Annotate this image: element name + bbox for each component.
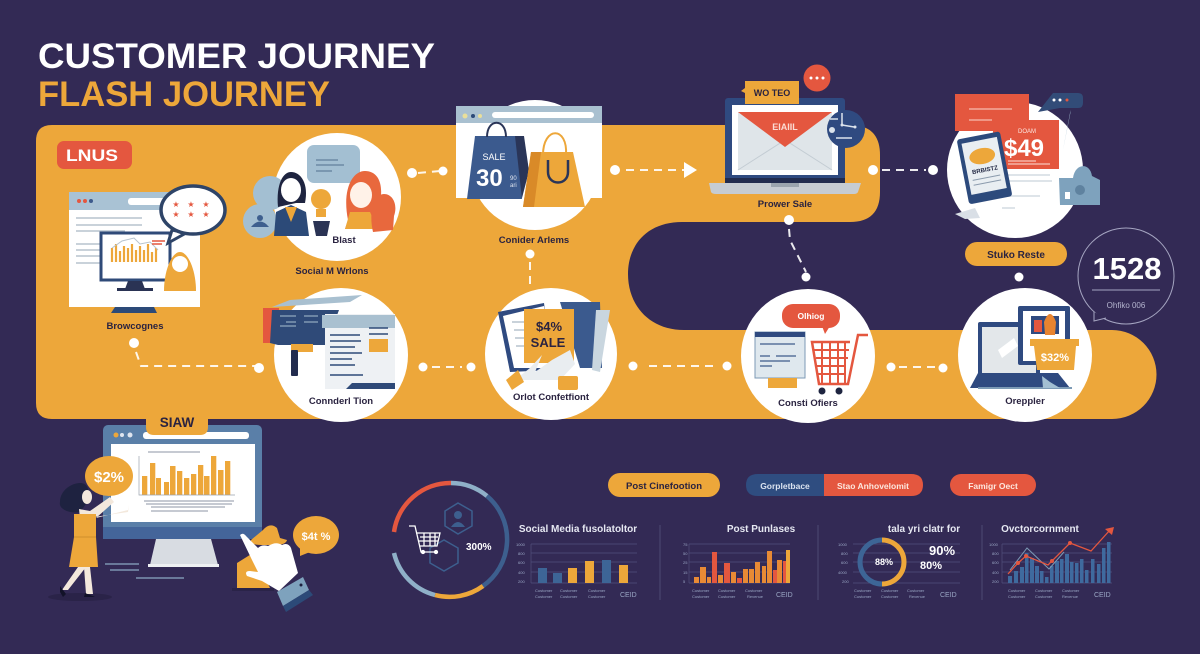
- chart: post purchase bars: Customer: [718, 594, 736, 599]
- illustration: woman presenting: [48, 456, 133, 601]
- chart: donut percentages: CEID: [940, 592, 957, 599]
- chart: social media bars: Customer: [588, 594, 606, 599]
- step: Browsing monitor: [69, 186, 225, 332]
- stat bubble: 1528: [1092, 251, 1162, 286]
- speech bubble with stars: ★: [172, 210, 180, 219]
- chart: social media bars: Customer: [535, 588, 553, 593]
- red offer cards: [955, 94, 1059, 169]
- title: CUSTOMER JOURNEY: [38, 37, 435, 76]
- chart: combo bars and trend line: Customer: [1035, 594, 1053, 599]
- step: Consideration bags: [456, 100, 602, 246]
- shopping cart: [812, 335, 868, 394]
- camera icon: [1059, 166, 1100, 205]
- chart: combo bars and trend line: Customer: [1008, 594, 1026, 599]
- tag: LNUS: LNUS: [66, 146, 118, 165]
- chart: combo bars and trend line: Ovctorcornment: [1001, 524, 1080, 535]
- bar chart: [142, 456, 230, 495]
- chart: combo bars and trend line: Customer: [1062, 588, 1080, 593]
- chart: combo bars and trend line: 200: [992, 579, 999, 584]
- tag: WO TEO: [741, 81, 799, 104]
- step: Browsing monitor: Browcognes: [106, 321, 164, 332]
- chart: post purchase bars: Customer: [692, 588, 710, 593]
- navy sale bag: ari: [510, 183, 517, 189]
- chart: combo bars and trend line: Revenue: [1062, 594, 1079, 599]
- chart: donut percentages: tala yri clatr for: [888, 524, 960, 535]
- chart: social media bars: Customer: [535, 594, 553, 599]
- chart: post purchase bars: Post Punlases: [727, 524, 796, 535]
- pill: blue and red split: Stao Anhovelomit: [837, 481, 909, 491]
- chart: combo bars and trend line: Customer: [1035, 588, 1053, 593]
- price bubble: $2%: [94, 469, 124, 486]
- chart: post purchase bars: 75: [683, 542, 688, 547]
- chart: donut percentages: [838, 524, 960, 599]
- chart: post purchase bars: Revenue: [747, 594, 764, 599]
- chart: donut percentages: 80%: [920, 560, 942, 572]
- step: Order confidence: [485, 288, 617, 420]
- chart: post purchase bars: 15: [683, 570, 688, 575]
- donut: cart ring: 300%: [466, 542, 492, 553]
- chart: post purchase bars: CEID: [776, 592, 793, 599]
- cart icon: [409, 526, 440, 554]
- navy sale bag: 30: [476, 165, 503, 192]
- chart: donut percentages: Customer: [907, 588, 925, 593]
- pills row: [608, 473, 1036, 497]
- chart: social media bars: CEID: [620, 592, 637, 599]
- mini monitor chart: [101, 233, 170, 291]
- chart: donut percentages: 800: [841, 551, 848, 556]
- chart: donut percentages: Customer: [881, 594, 899, 599]
- stat bubble: Ohfiko 006: [1107, 301, 1146, 310]
- pill: post confirmation: Post Cinefootion: [626, 481, 702, 492]
- chart: donut percentages: Revenue: [909, 594, 926, 599]
- orange bag: [523, 133, 585, 207]
- step: Conditional documents: Connderl Tion: [309, 396, 373, 407]
- journey path band: [36, 125, 1156, 419]
- pill: family best: [950, 474, 1036, 496]
- pill: blue and red split: Gorpletbace: [760, 481, 810, 491]
- chart: social media bars: Customer: [560, 594, 578, 599]
- chart: post purchase bars: 25: [683, 560, 688, 565]
- chart: post purchase bars: Customer: [718, 588, 736, 593]
- price bubble: $4t %: [302, 531, 331, 543]
- speech bubble with stars: ★: [202, 210, 210, 219]
- sale card: [524, 309, 574, 363]
- pill: post confirmation: [608, 473, 720, 497]
- pill: family best: Famigr Oect: [968, 481, 1018, 491]
- tab: SIAW: [146, 410, 208, 435]
- red-haired women: [345, 171, 395, 232]
- step: Social Media: Blast: [332, 235, 356, 246]
- illustration: pointing hand: [232, 516, 339, 612]
- step: Consideration bags: Conider Arlems: [499, 235, 569, 246]
- connectors: [129, 162, 1024, 373]
- chat bubble: [1038, 93, 1083, 150]
- speech bubble with stars: ★: [187, 210, 195, 219]
- sale card: SALE: [531, 335, 566, 350]
- step: Cart offers: Consti Ofiers: [778, 398, 838, 409]
- speech bubble with stars: ★: [202, 200, 210, 209]
- step: Email laptop: EIAIIL: [772, 122, 798, 132]
- pill: blue and red split: [746, 474, 923, 496]
- tag: LNUS: [57, 141, 132, 169]
- chart: social media bars: 200: [518, 579, 525, 584]
- price bubble: [85, 456, 133, 496]
- chart: combo bars and trend line: 600: [992, 560, 999, 565]
- chart: post purchase bars: Customer: [692, 594, 710, 599]
- chart: donut percentages: 1000: [838, 542, 848, 547]
- title: [38, 37, 435, 114]
- speech bubble with stars: [161, 186, 225, 243]
- chart: combo bars and trend line: 400: [992, 570, 999, 575]
- step: Conditional documents: [263, 288, 408, 422]
- speech bubble with stars: ★: [172, 200, 180, 209]
- chart: donut percentages: 90%: [929, 543, 955, 558]
- chart: donut percentages: 88%: [875, 557, 893, 567]
- navy sale bag: [467, 123, 529, 199]
- step: Price offer: [947, 93, 1100, 238]
- tab: SIAW: SIAW: [160, 415, 195, 430]
- red bubble: Olhiog: [798, 311, 824, 321]
- businesswoman: [274, 172, 309, 236]
- step: Oreppler devices: [958, 288, 1092, 422]
- navy sale bag: SALE: [482, 152, 506, 162]
- stat bubble: [1078, 228, 1174, 324]
- step: Email laptop: Prower Sale: [758, 199, 812, 210]
- chart: social media bars: 400: [518, 570, 525, 575]
- tablet: [957, 131, 1012, 204]
- chart: donut percentages: Customer: [881, 588, 899, 593]
- chart: donut percentages: Customer: [854, 588, 872, 593]
- woman avatar: [164, 252, 196, 291]
- tablet: BRBISTZ: [972, 165, 999, 176]
- pill: Stunk Reste: Stuko Reste: [987, 250, 1045, 261]
- chart: donut percentages: 600: [841, 560, 848, 565]
- sale card: $4%: [536, 319, 562, 334]
- chart: combo bars and trend line: CEID: [1094, 592, 1111, 599]
- offer doc: [755, 332, 805, 388]
- chart: post purchase bars: Customer: [745, 588, 763, 593]
- team blobs: [243, 176, 287, 238]
- chart: social media bars: [516, 524, 637, 599]
- red offer cards: DOAM: [1018, 129, 1036, 135]
- chart: post purchase bars: [683, 524, 796, 599]
- chart: donut percentages: 4000: [838, 570, 848, 575]
- chart: combo bars and trend line: Customer: [1008, 588, 1026, 593]
- chart: social media bars: 1000: [516, 542, 526, 547]
- title: FLASH JOURNEY: [38, 75, 330, 114]
- donut: cart ring: [394, 483, 507, 597]
- pill: Stunk Reste: [965, 242, 1067, 266]
- step: Social Media: [243, 133, 401, 277]
- chart: post purchase bars: 5: [683, 579, 686, 584]
- price basket: $32%: [1041, 352, 1069, 364]
- hands: [506, 350, 578, 390]
- step: Cart offers: [741, 289, 875, 423]
- chart: combo bars and trend line: 800: [992, 551, 999, 556]
- chart: social media bars: Customer: [588, 588, 606, 593]
- step: Email laptop: [709, 64, 865, 210]
- step: Oreppler devices: Oreppler: [1005, 396, 1045, 407]
- chart: post purchase bars: 50: [683, 551, 688, 556]
- article page: [322, 314, 395, 389]
- illustration: analytics monitor: [103, 410, 262, 578]
- chart: donut percentages: Customer: [854, 594, 872, 599]
- step: Order confidence: Orlot Confetfiont: [513, 392, 590, 403]
- step: Social Media: Social M Wrlons: [295, 266, 369, 277]
- chart: combo bars and trend line: 1000: [989, 542, 999, 547]
- speech bubble: [307, 145, 360, 183]
- network badge: [827, 110, 865, 148]
- tag: WO TEO: WO TEO: [754, 88, 790, 98]
- navy sale bag: 90: [510, 176, 517, 182]
- chart: social media bars: Customer: [560, 588, 578, 593]
- chart: social media bars: Social Media fusolatoltor: [519, 524, 637, 535]
- bulb: [311, 189, 331, 236]
- chart: social media bars: 800: [518, 551, 525, 556]
- chart: combo bars and trend line: [989, 524, 1114, 599]
- chart: social media bars: 600: [518, 560, 525, 565]
- red chat dot: [804, 64, 830, 92]
- red offer cards: $49: [1004, 135, 1044, 162]
- speech bubble with stars: ★: [187, 200, 195, 209]
- chart: donut percentages: 200: [842, 579, 849, 584]
